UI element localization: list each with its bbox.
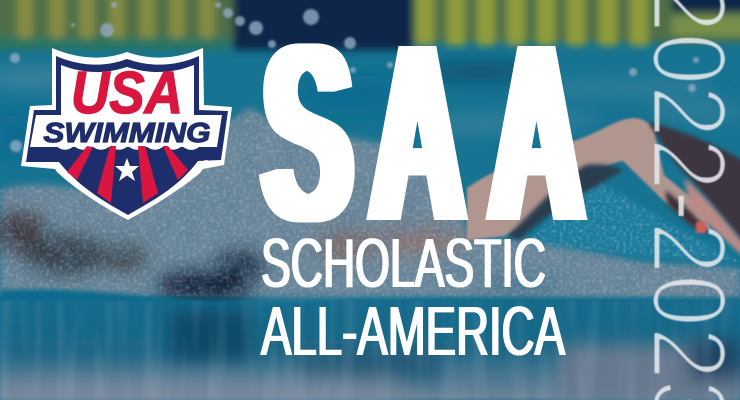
splash: [0, 108, 740, 300]
subtitle line 2: ALL-AMERICA: [261, 292, 565, 370]
wave edge: [56, 145, 199, 150]
teal water under arm: [530, 175, 740, 262]
logo: USA Swimming shield: [21, 48, 232, 220]
SWIMMING wordmark: SWIMMING: [44, 117, 210, 148]
arm shadow: [507, 164, 624, 240]
shield outer white: [21, 48, 232, 220]
registered mark: ®: [202, 159, 210, 170]
shield navy frame: [26, 56, 228, 215]
hair and forearm: [648, 122, 740, 245]
title: SAA: [263, 0, 583, 274]
star: [115, 158, 139, 181]
lower water: [0, 289, 740, 400]
USA wordmark: USA: [71, 60, 183, 126]
subtitle line 1: SCHOLASTIC: [261, 224, 546, 302]
water droplets: [10, 2, 699, 152]
water ripples: [0, 66, 740, 133]
red rays: [67, 146, 188, 203]
swimmer arm: [467, 118, 712, 240]
pool wall band: [0, 0, 740, 50]
white panel: [30, 65, 222, 147]
dark splash shadows: [0, 212, 560, 299]
